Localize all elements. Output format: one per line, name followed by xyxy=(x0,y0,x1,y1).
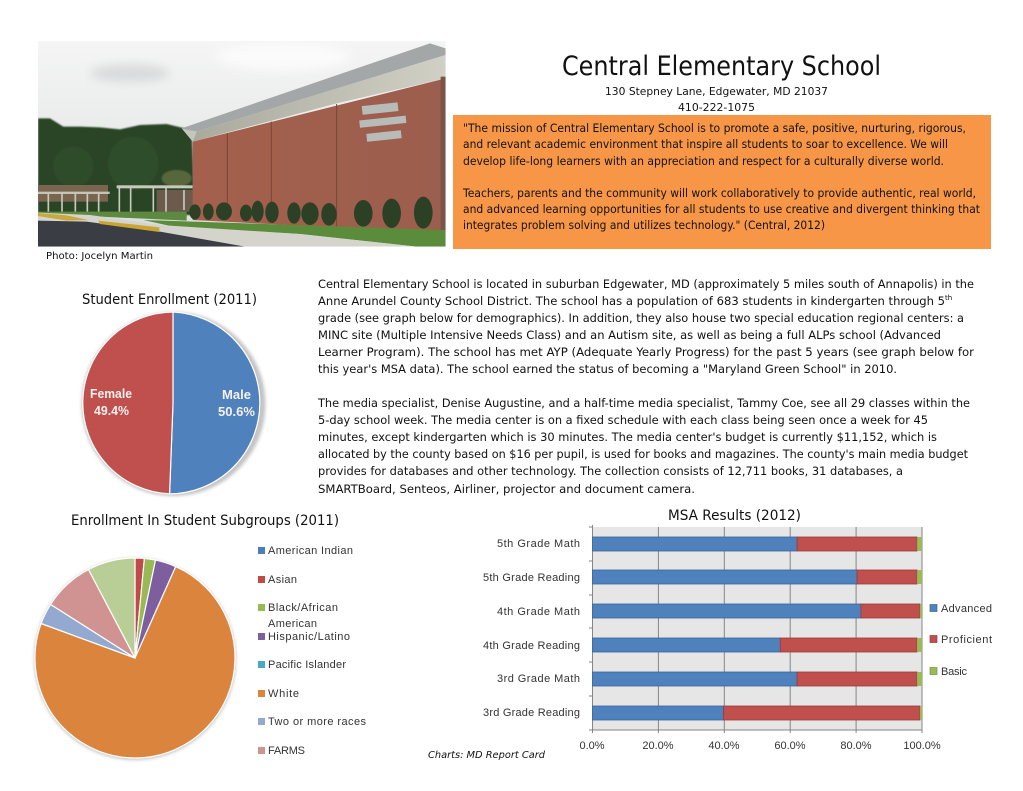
legend: MSA results: Proficient xyxy=(941,634,992,646)
text block: school description: Learner Program). The school has met AYP (Adequate Yearly Progress) for the past 5 years (see graph below for xyxy=(318,345,974,359)
pie chart: student enrollment: Male xyxy=(222,388,251,402)
legend: student subgroups xyxy=(258,545,366,757)
text block: media center: allocated by the county based on $16 per pupil, is used for books and magazines. The county's main media budget xyxy=(318,447,968,461)
heading: student subgroups: Enrollment In Student Subgroups (2011) xyxy=(71,513,339,529)
legend: MSA results: Basic xyxy=(941,666,968,678)
legend: MSA results xyxy=(930,603,992,678)
text block: media center: provides for databases and other technology. The collection consists of 12,711 books, 31 databases, a xyxy=(318,464,903,478)
bar chart: MSA results: 40.0% xyxy=(708,740,740,752)
panel: mission statement: integrates problem solving and utilizes technology." (Central, 2012) xyxy=(463,218,825,232)
panel: mission statement: and relevant academic environment that inspire all students to soar to excellence. We will xyxy=(463,137,948,151)
bar chart: MSA results: 100.0% xyxy=(903,740,941,752)
legend: MSA results: Advanced xyxy=(941,603,992,615)
bar chart: MSA results xyxy=(483,525,941,752)
pie chart: student enrollment: 49.4% xyxy=(94,404,129,418)
pie chart: student enrollment xyxy=(82,312,266,496)
heading: student enrollment: Student Enrollment (2011) xyxy=(82,292,257,308)
legend: student subgroups: Asian xyxy=(268,574,297,586)
bar chart: MSA results: 60.0% xyxy=(774,740,806,752)
pie chart: student subgroups xyxy=(34,558,236,760)
text block: school description: Central Elementary School is located in suburban Edgewater, MD (approximately 5 miles south of Annapolis) in the xyxy=(318,277,974,291)
text block: media center: The media specialist, Denise Augustine, and a half-time media specialist, Tammy Coe, see all 29 classes within the xyxy=(317,396,970,410)
text block: media center: SMARTBoard, Senteos, Airliner, projector and document camera. xyxy=(318,482,695,496)
bar chart: MSA results: 4th Grade Reading xyxy=(483,640,580,652)
legend: student subgroups: Two or more races xyxy=(268,716,366,728)
panel: mission statement xyxy=(453,115,991,249)
text block: media center: minutes, except kindergarten which is 30 minutes. The media center's budget is currently $11,152, which is xyxy=(318,430,937,444)
chart credit: Charts: MD Report Card xyxy=(428,750,546,761)
panel: mission statement: develop life-long learners with an appreciation and respect for a culturally diverse world. xyxy=(463,154,944,168)
text block: media center: 5-day school week. The media center is on a fixed schedule with each class being seen once a week for 45 xyxy=(318,413,928,427)
text block: school description: th xyxy=(945,294,952,302)
bar chart: MSA results: 80.0% xyxy=(840,740,872,752)
text block: school description: grade (see graph below for demographics). In addition, they also house two special education regional centers: a xyxy=(318,311,964,325)
address and phone xyxy=(605,85,828,114)
text block: school description: this year's MSA data). The school earned the status of becoming a "Maryland Green School" in 2010. xyxy=(318,362,897,376)
bar chart: MSA results: 0.0% xyxy=(579,740,605,752)
text block: school description: Anne Arundel County School District. The school has a population of 683 students in kindergarten through 5 xyxy=(318,294,945,308)
legend: student subgroups: Black/African xyxy=(268,602,338,614)
legend: student subgroups: American xyxy=(268,618,317,630)
pie chart: student enrollment: 50.6% xyxy=(218,405,255,419)
title: Central Elementary School xyxy=(562,51,881,82)
bar chart: MSA results: 5th Grade Reading xyxy=(483,572,580,584)
text block: school description xyxy=(318,277,974,376)
legend: student subgroups: FARMS xyxy=(268,745,305,757)
bar chart: MSA results: 5th Grade Math xyxy=(497,538,580,550)
panel: mission statement: "The mission of Central Elementary School is to promote a safe, positive, nurturing, rigorous, xyxy=(463,121,966,135)
address and phone: 410-222-1075 xyxy=(678,101,755,114)
text block: media center xyxy=(317,396,970,496)
address and phone: 130 Stepney Lane, Edgewater, MD 21037 xyxy=(605,85,828,98)
legend: student subgroups: Hispanic/Latino xyxy=(268,631,350,643)
bar chart: MSA results: 3rd Grade Reading xyxy=(483,707,580,719)
text block: school description: MINC site (Multiple Intensive Needs Class) and an Autism site, as well as being a full ALPs school (Advanced xyxy=(318,328,941,342)
panel: mission statement: Teachers, parents and the community will work collaboratively to provide authentic, real world, xyxy=(462,186,976,200)
panel: mission statement: and advanced learning opportunities for all students to use creative and divergent thinking that xyxy=(463,202,980,216)
bar chart: MSA results: 4th Grade Math xyxy=(497,606,580,618)
legend: student subgroups: White xyxy=(268,688,299,700)
legend: student subgroups: Pacific Islander xyxy=(268,659,346,671)
pie chart: student enrollment: Female xyxy=(90,387,132,401)
heading: MSA results: MSA Results (2012) xyxy=(668,508,801,524)
bar chart: MSA results: 3rd Grade Math xyxy=(497,673,580,685)
photo credit: Photo: Jocelyn Martin xyxy=(46,251,153,262)
photo: school building xyxy=(38,41,446,247)
bar chart: MSA results: 20.0% xyxy=(642,740,674,752)
legend: student subgroups: American Indian xyxy=(268,545,353,557)
